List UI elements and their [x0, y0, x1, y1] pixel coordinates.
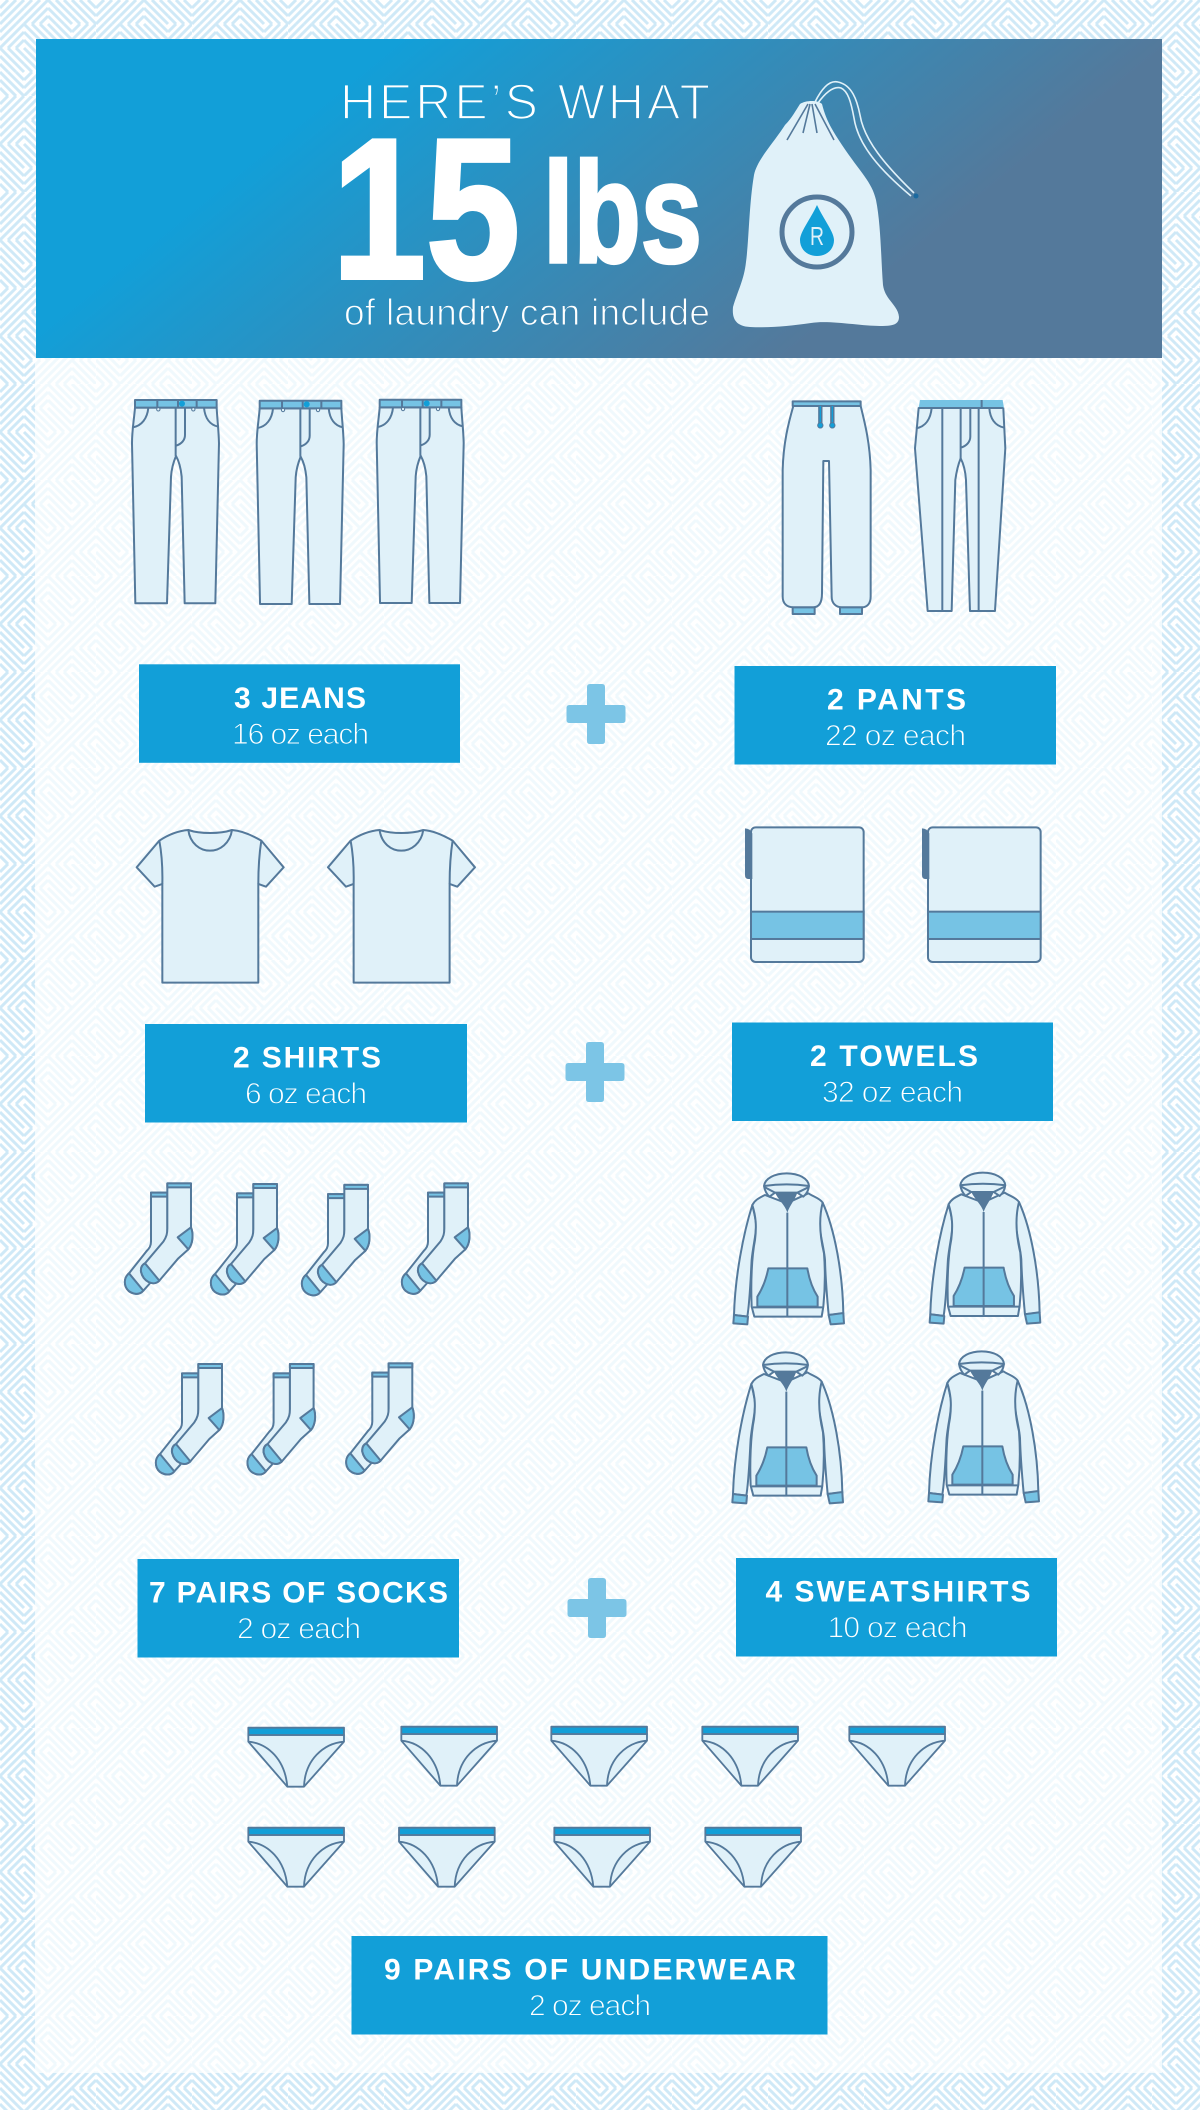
panel: towels — [732, 827, 1053, 1121]
icon: plus 1 — [566, 684, 626, 744]
label: 9 pairs of underwear: 2 oz each — [529, 1990, 651, 2023]
icon: laundry bag: R — [810, 221, 824, 251]
heading: lbs: lbs — [543, 134, 702, 293]
icon: underwear 4 — [702, 1727, 798, 1786]
label: 4 sweatshirts — [736, 1558, 1057, 1656]
panel: socks — [125, 1183, 470, 1658]
label: 2 towels: 2 TOWELS — [810, 1040, 978, 1073]
icon: sweatshirt 1 — [733, 1173, 844, 1324]
icon: socks pair 6 — [247, 1364, 315, 1474]
icon: underwear 5 — [849, 1727, 945, 1786]
icon: plus 2 — [566, 1042, 624, 1102]
icon: underwear 3 — [551, 1727, 647, 1786]
icon: shirt 1 — [137, 830, 284, 983]
icon: jeans 1 — [132, 400, 219, 603]
label: 3 jeans: 16 oz each — [232, 718, 369, 751]
subheading: of laundry can include: of laundry can include — [344, 292, 710, 333]
icon: sweatshirt 2 — [930, 1173, 1040, 1324]
icon: sweatshirt 4 — [928, 1351, 1039, 1502]
label: 3 jeans: 3 JEANS — [234, 682, 366, 715]
label: 2 towels — [732, 1022, 1053, 1121]
label: 4 sweatshirts: 10 oz each — [828, 1612, 968, 1645]
icon: socks pair 1 — [125, 1183, 193, 1294]
label: 2 towels: 32 oz each — [822, 1076, 963, 1109]
icon: laundry bag — [733, 82, 918, 327]
panel: underwear — [248, 1727, 945, 2034]
panel: shirts — [137, 830, 475, 1122]
label: 2 shirts — [145, 1024, 467, 1122]
icon: plus 3 — [568, 1578, 626, 1638]
label: 4 sweatshirts: 4 SWEATSHIRTS — [766, 1576, 1030, 1609]
icon: underwear 6 — [248, 1828, 344, 1887]
icon: towel 1 — [745, 827, 864, 962]
label: 2 pants: 2 PANTS — [827, 684, 966, 717]
icon: underwear 1 — [248, 1728, 344, 1787]
label: 3 jeans — [139, 664, 460, 763]
icon: underwear 2 — [401, 1727, 497, 1786]
heading: here's what: HERE’S WHAT — [340, 74, 710, 130]
panel: pants — [734, 400, 1056, 764]
label: 9 pairs of underwear: 9 PAIRS OF UNDERWEAR — [384, 1954, 796, 1987]
icon: socks pair 4 — [402, 1183, 470, 1294]
label: 2 pants: 22 oz each — [825, 720, 966, 753]
label: 2 shirts: 2 SHIRTS — [233, 1042, 381, 1075]
icon: socks pair 7 — [346, 1363, 414, 1474]
label: 2 shirts: 6 oz each — [245, 1078, 367, 1111]
icon: jeans 3 — [377, 400, 464, 603]
icon: underwear 8 — [554, 1828, 650, 1887]
label: 7 pairs of socks: 7 PAIRS OF SOCKS — [149, 1577, 448, 1610]
icon: underwear 9 — [705, 1828, 801, 1887]
label: 7 pairs of socks: 2 oz each — [237, 1613, 361, 1646]
heading: 15: 15 — [332, 98, 520, 321]
icon: socks pair 2 — [211, 1184, 279, 1294]
icon: socks pair 5 — [156, 1364, 224, 1474]
icon: underwear 7 — [399, 1828, 495, 1887]
label: 2 pants — [734, 666, 1056, 764]
panel: jeans — [132, 400, 464, 763]
icon: shirt 2 — [328, 830, 475, 983]
panel: sweatshirts — [732, 1173, 1057, 1656]
label: 7 pairs of socks — [138, 1559, 459, 1658]
icon: towel 2 — [922, 827, 1041, 962]
panel: header banner — [36, 39, 1162, 358]
label: 9 pairs of underwear — [352, 1936, 828, 2034]
icon: sweatshirt 3 — [732, 1352, 843, 1503]
icon: sweatpants — [783, 401, 871, 614]
icon: slacks — [915, 400, 1005, 611]
icon: jeans 2 — [257, 401, 344, 604]
icon: socks pair 3 — [302, 1185, 370, 1295]
panel: main white area — [35, 358, 1162, 2073]
